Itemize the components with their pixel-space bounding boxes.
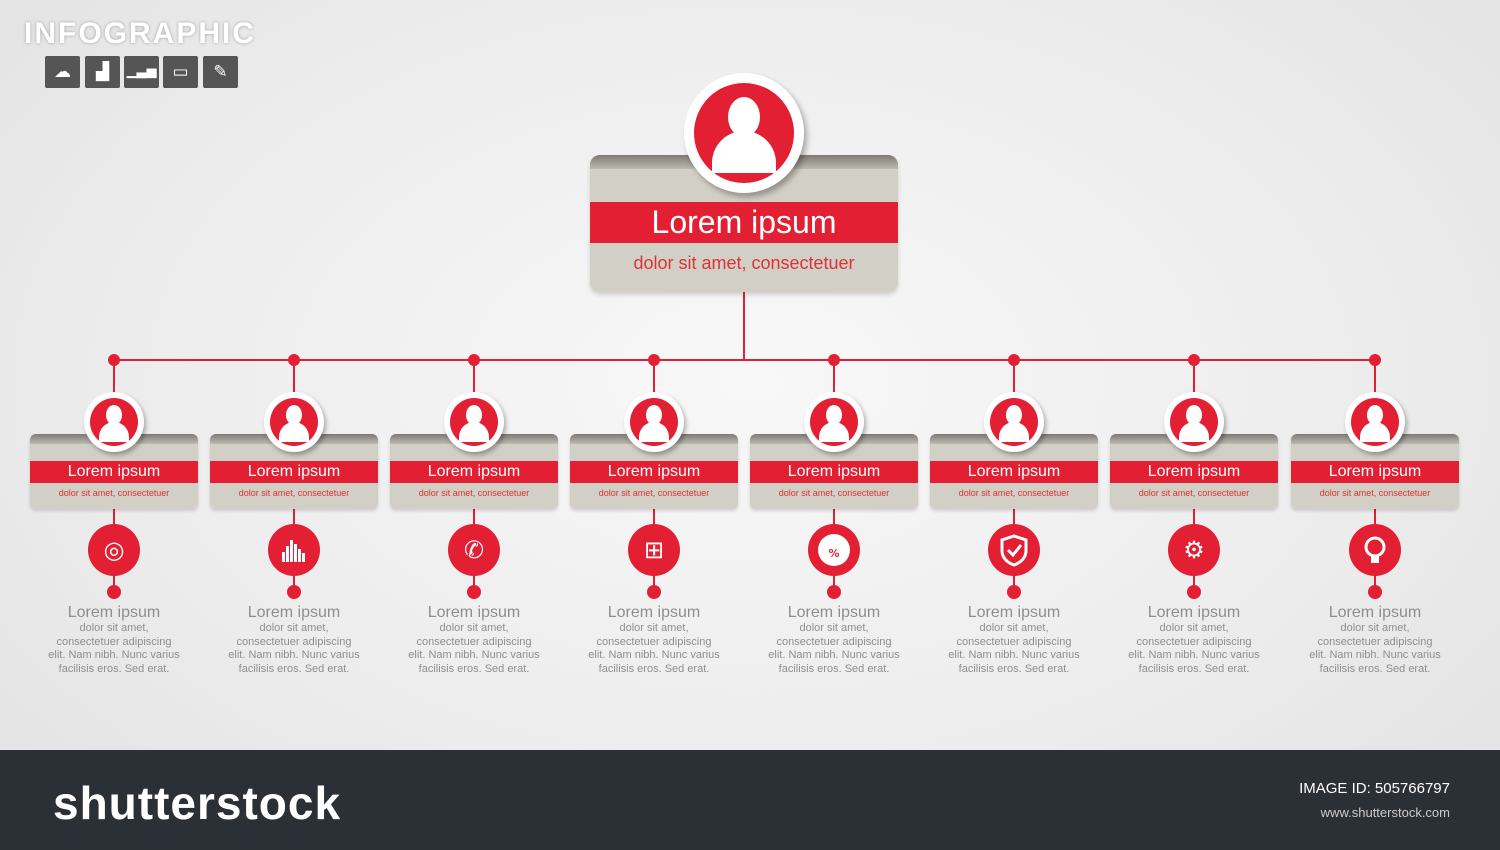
text 8 [1309,604,1441,674]
title: INFOGRAPHIC [24,17,256,50]
footer image id: IMAGE ID: 505766797 [1299,780,1450,797]
text 4: Lorem ipsum [608,604,700,621]
card 1: Lorem ipsum [68,463,160,480]
card 6 [930,434,1098,509]
card 7 [1110,434,1278,509]
card 4 [570,434,738,509]
text 6: consectetuer adipiscing [957,636,1071,648]
text 8: consectetuer adipiscing [1318,636,1432,648]
icon: hierarchy: ⊞ [644,536,664,564]
icon: gears: ⚙ [1183,536,1205,564]
header icons: ▁▃▅ [126,64,156,79]
card 7: Lorem ipsum [1148,463,1240,480]
text 4 [588,604,720,674]
icon: target: ◎ [104,536,124,564]
avatar 7 [1164,392,1224,452]
card 2: Lorem ipsum [248,463,340,480]
text 8: dolor sit amet, [1340,622,1410,634]
text 5: facilisis eros. Sed erat. [779,662,889,674]
card 8: Lorem ipsum [1329,463,1421,480]
text 4: dolor sit amet, [619,622,689,634]
card 3: Lorem ipsum [428,463,520,480]
avatar 5 [804,392,864,452]
icon: hierarchy [628,524,680,576]
text 3: Lorem ipsum [428,604,520,621]
card 4: Lorem ipsum [608,463,700,480]
icon: target [88,524,140,576]
icon: pie percent [808,524,860,576]
text 7: consectetuer adipiscing [1137,636,1251,648]
text 3 [408,604,540,674]
text 3: facilisis eros. Sed erat. [419,662,529,674]
text 1 [48,604,180,674]
card 8 [1291,434,1459,509]
text 3: consectetuer adipiscing [417,636,531,648]
text 5: consectetuer adipiscing [777,636,891,648]
card 7: dolor sit amet, consectetuer [1139,488,1249,498]
text 2: facilisis eros. Sed erat. [239,662,349,674]
main card [590,155,898,292]
avatar 2 [264,392,324,452]
text 2 [228,604,360,674]
footer url: www.shutterstock.com [1321,805,1450,820]
column 1 [29,354,199,674]
column 7 [1109,354,1279,674]
text 8: elit. Nam nibh. Nunc varius [1309,649,1441,661]
text 1: consectetuer adipiscing [57,636,171,648]
text 6 [948,604,1080,674]
text 5: dolor sit amet, [799,622,869,634]
text 6: Lorem ipsum [968,604,1060,621]
header icons [45,56,238,88]
card 5 [750,434,918,509]
card 2: dolor sit amet, consectetuer [239,488,349,498]
card 3: dolor sit amet, consectetuer [419,488,529,498]
footer bar [0,750,1500,850]
text 4: elit. Nam nibh. Nunc varius [588,649,720,661]
card 2 [210,434,378,509]
text 2: Lorem ipsum [248,604,340,621]
card 6: Lorem ipsum [968,463,1060,480]
text 7: facilisis eros. Sed erat. [1139,662,1249,674]
avatar 3 [444,392,504,452]
text 8: Lorem ipsum [1329,604,1421,621]
icon: bars [268,524,320,576]
text 1: Lorem ipsum [68,604,160,621]
card 3 [390,434,558,509]
text 5: Lorem ipsum [788,604,880,621]
footer logo: shutterstock [53,777,341,829]
text 1: dolor sit amet, [79,622,149,634]
text 2: dolor sit amet, [259,622,329,634]
card 6: dolor sit amet, consectetuer [959,488,1069,498]
icon: pie percent: % [828,547,840,560]
text 7 [1128,604,1260,674]
text 4: facilisis eros. Sed erat. [599,662,709,674]
column 5 [749,354,919,674]
header icons: ☁ [54,62,71,82]
text 2: consectetuer adipiscing [237,636,351,648]
card 8: dolor sit amet, consectetuer [1320,488,1430,498]
main heading: Lorem ipsum [652,204,836,240]
text 7: elit. Nam nibh. Nunc varius [1128,649,1260,661]
card 5: Lorem ipsum [788,463,880,480]
main subheading: dolor sit amet, consectetuer [633,253,855,273]
card 4: dolor sit amet, consectetuer [599,488,709,498]
column 6 [929,354,1099,674]
text 5 [768,604,900,674]
text 6: facilisis eros. Sed erat. [959,662,1069,674]
icon: phone: ✆ [464,536,484,564]
text 6: dolor sit amet, [979,622,1049,634]
column 3 [389,354,559,674]
text 1: facilisis eros. Sed erat. [59,662,169,674]
header icons: ▭ [172,62,189,82]
icon: phone [448,524,500,576]
text 5: elit. Nam nibh. Nunc varius [768,649,900,661]
text 2: elit. Nam nibh. Nunc varius [228,649,360,661]
icon: bulb [1349,524,1401,576]
card 1: dolor sit amet, consectetuer [59,488,169,498]
avatar 4 [624,392,684,452]
text 8: facilisis eros. Sed erat. [1320,662,1430,674]
icon: shield [988,524,1040,576]
text 4: consectetuer adipiscing [597,636,711,648]
main avatar [684,73,804,193]
card 5: dolor sit amet, consectetuer [779,488,889,498]
text 3: elit. Nam nibh. Nunc varius [408,649,540,661]
text 7: dolor sit amet, [1159,622,1229,634]
avatar 8 [1345,392,1405,452]
avatar 6 [984,392,1044,452]
column 8 [1290,354,1460,674]
card 1 [30,434,198,509]
text 6: elit. Nam nibh. Nunc varius [948,649,1080,661]
header icons: ▟ [96,62,109,82]
column 4 [569,354,739,674]
column 2 [209,354,379,674]
text 7: Lorem ipsum [1148,604,1240,621]
header icons: ✎ [213,62,228,82]
text 1: elit. Nam nibh. Nunc varius [48,649,180,661]
text 3: dolor sit amet, [439,622,509,634]
connector lines [120,292,1370,361]
main heading [590,202,898,243]
avatar 1 [84,392,144,452]
icon: gears [1168,524,1220,576]
